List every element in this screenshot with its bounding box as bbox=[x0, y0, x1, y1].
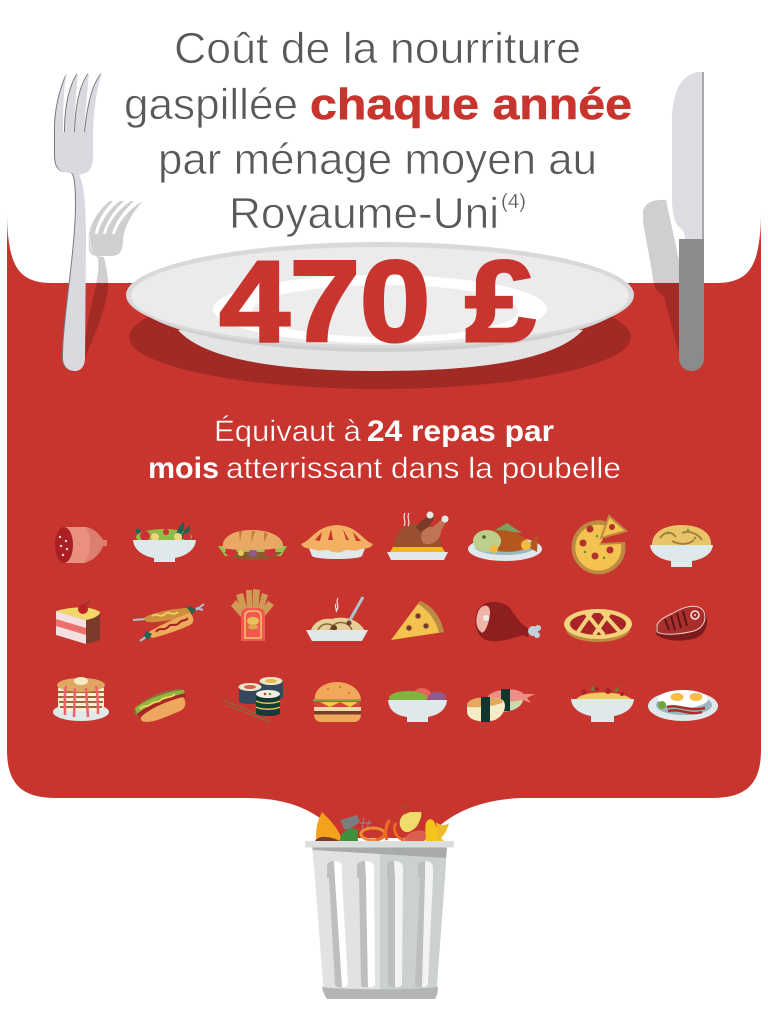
title: gaspillée bbox=[124, 80, 298, 129]
title: chaque année bbox=[310, 80, 632, 129]
bin slots bbox=[327, 861, 433, 987]
equivalence text: mois bbox=[148, 452, 219, 485]
icon: green salad bowl bbox=[388, 688, 447, 722]
icon: noodle bowl bbox=[650, 525, 713, 567]
knife bbox=[672, 72, 704, 371]
icon: eggs and bacon bbox=[648, 690, 718, 721]
food waste in the bin bbox=[315, 805, 449, 841]
title bbox=[124, 24, 632, 238]
icon: salad bowl bbox=[133, 522, 196, 562]
title: Royaume-Uni bbox=[229, 189, 499, 238]
icon: ham leg bbox=[475, 602, 541, 641]
title: Coût de la nourriture bbox=[174, 24, 581, 73]
icon: cake slice bbox=[56, 600, 100, 644]
icon: pizza slice bbox=[391, 601, 444, 640]
icon: corn dogs bbox=[133, 604, 204, 641]
red table panel with trash funnel bbox=[7, 205, 761, 838]
icon: steak bbox=[656, 606, 707, 641]
icon: spaghetti bbox=[306, 597, 368, 641]
icon: lattice pie bbox=[564, 609, 632, 642]
title: par ménage moyen au bbox=[158, 135, 597, 184]
equivalence text: atterrissant dans la poubelle bbox=[226, 452, 621, 485]
icon: pancakes bbox=[53, 677, 109, 721]
icon: sandwich bbox=[218, 530, 287, 560]
icon: french fries bbox=[231, 589, 274, 641]
equivalence text: 24 repas par bbox=[367, 415, 554, 448]
icon: fish dish bbox=[468, 523, 542, 561]
icon: hot dog bbox=[134, 689, 185, 722]
icon: rice bowl bbox=[571, 685, 634, 722]
equivalence text: Équivaut à bbox=[214, 415, 361, 448]
icon: nigiri sushi bbox=[467, 689, 535, 722]
equivalence text bbox=[148, 415, 621, 485]
amount: 470 £ bbox=[220, 238, 536, 366]
fork bbox=[54, 73, 102, 371]
icon: salami bbox=[55, 527, 107, 563]
title: (4) bbox=[501, 191, 526, 213]
icon: pizza bbox=[572, 516, 626, 574]
icon: sushi rolls bbox=[223, 677, 283, 722]
plate shadow bbox=[129, 285, 631, 389]
plate bbox=[126, 242, 634, 371]
knife shadow bbox=[643, 200, 680, 358]
trash bin bbox=[305, 841, 454, 999]
icon: roast turkey bbox=[387, 512, 448, 560]
icon: burger bbox=[313, 682, 361, 722]
fork shadow bbox=[85, 201, 143, 358]
icon: fruit pie bbox=[301, 525, 373, 559]
